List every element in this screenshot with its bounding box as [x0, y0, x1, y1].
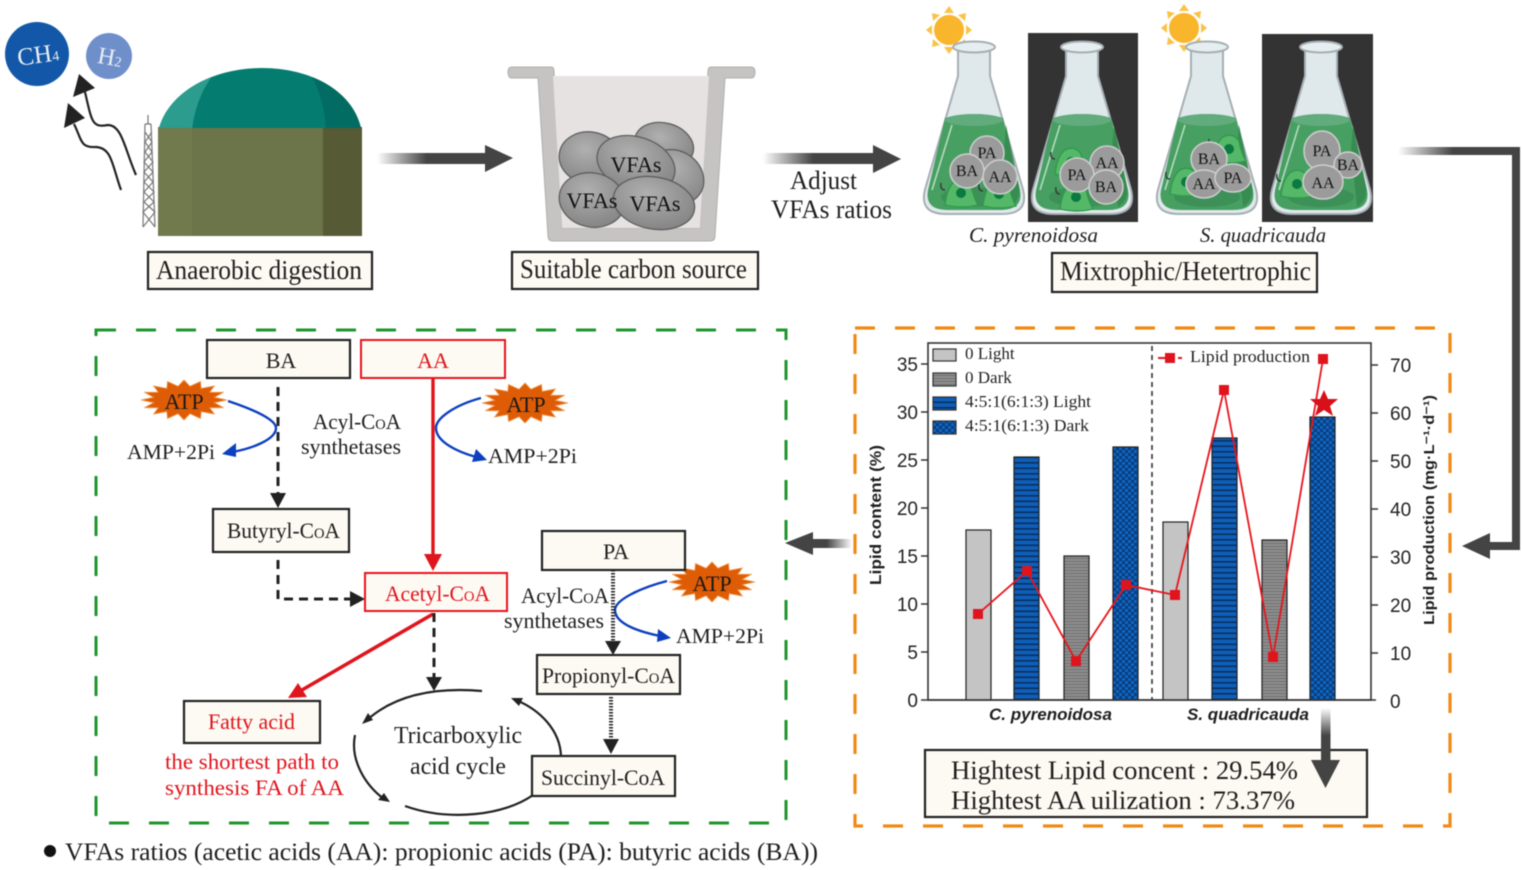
panel: results chart frame — [855, 328, 1450, 826]
stats callout — [925, 750, 1367, 817]
red arrow: AA to Acetyl — [424, 379, 442, 571]
flask: S. quadricauda dark: BA — [1337, 157, 1360, 174]
enzyme label 2 — [504, 583, 609, 633]
flask: C. pyrenoidosa dark: BA — [1095, 179, 1118, 196]
species axis labels: C. pyrenoidosa — [989, 706, 1112, 724]
ATP burst 2: ATP — [506, 392, 546, 417]
left axis labels: 25 — [897, 451, 918, 472]
left axis labels: 35 — [897, 355, 918, 376]
enzyme label 2: Acyl-COA — [521, 583, 609, 608]
box: PA — [542, 531, 685, 570]
ATP burst 3 — [669, 562, 755, 602]
box: BA: BA — [266, 348, 296, 373]
blue curve 2 — [436, 398, 487, 462]
gas bubble: CH4 — [5, 22, 69, 86]
flask: S. quadricauda dark: AA — [1311, 175, 1335, 192]
box: Fatty acid — [184, 701, 320, 743]
arrow: elbow from flasks to chart — [1398, 147, 1520, 559]
flask: C. pyrenoidosa light: BA — [956, 163, 979, 180]
flask: S. quadricauda dark — [1271, 42, 1371, 214]
enzyme label 2: synthetases — [504, 608, 604, 633]
left axis labels — [897, 355, 918, 712]
flask: S. quadricauda light: BA — [1198, 151, 1221, 168]
species axis labels: S. quadricauda — [1187, 706, 1309, 724]
right axis labels: 0 — [1390, 692, 1401, 713]
box: BA — [207, 340, 350, 378]
species labels — [969, 223, 1326, 247]
box: Propionyl-CoA: Propionyl-COA — [542, 663, 675, 688]
arrows: gas release — [64, 74, 136, 190]
right axis labels: 20 — [1390, 596, 1411, 617]
box: Butyryl-CoA — [213, 509, 349, 552]
gas bubble: H2 — [86, 33, 132, 79]
blue curve 3 — [615, 581, 671, 642]
arrow: chart to pathway — [785, 532, 852, 555]
icon: anaerobic digester — [150, 60, 370, 236]
legend: 0 Dark — [965, 368, 1012, 387]
legend: Lipid production — [1190, 347, 1311, 366]
legend: 4:5:1(6:1:3) Dark — [965, 416, 1090, 435]
AMP labels: AMP+2Pi — [676, 624, 764, 648]
red note: shortest path: synthesis FA of AA — [165, 775, 344, 800]
tricarboxylic acid cycle — [354, 690, 561, 815]
AMP labels: AMP+2Pi — [127, 440, 215, 464]
box: PA: PA — [603, 539, 629, 564]
text: adjust VFAs ratios: VFAs ratios — [771, 195, 892, 224]
flask: C. pyrenoidosa light — [924, 42, 1024, 214]
box: Propionyl-CoA — [537, 655, 680, 694]
dotted arrow: Propionyl to Succinyl — [603, 697, 619, 754]
text: adjust VFAs ratios — [771, 166, 892, 224]
flask: S. quadricauda light: PA — [1224, 170, 1243, 187]
flask: C. pyrenoidosa dark — [1032, 42, 1132, 214]
stats callout: Hightest AA uilization : 73.37% — [951, 786, 1295, 815]
gas bubble: H2: H2 — [96, 43, 124, 73]
icon: red star — [1310, 390, 1338, 416]
arrow: chart to callout — [1311, 708, 1340, 788]
right axis labels — [1390, 356, 1411, 713]
stats callout: Hightest Lipid concent : 29.54% — [951, 756, 1298, 785]
blue curve 1 — [222, 401, 276, 457]
panel: metabolic pathway frame — [96, 330, 786, 823]
footnote: VFAs ratios: VFAs ratios (acetic acids (AA): propionic acids (PA): butyric acids (BA)) — [65, 839, 818, 866]
red note: shortest path: the shortest path to — [165, 749, 339, 774]
dashed arrow: Acetyl to cycle — [426, 613, 442, 691]
flask: S. quadricauda light — [1157, 42, 1257, 214]
panel: dark background, S. quadricauda — [1262, 34, 1373, 222]
right axis labels: 10 — [1390, 644, 1411, 665]
right axis labels: 40 — [1390, 500, 1411, 521]
left axis labels: 0 — [907, 691, 918, 712]
flask: C. pyrenoidosa light: PA — [978, 145, 997, 162]
ATP burst 1 — [141, 380, 227, 420]
left axis labels: 30 — [897, 403, 918, 424]
flask: S. quadricauda light: AA — [1192, 176, 1216, 193]
label: suitable carbon source: Suitable carbon source — [520, 254, 747, 284]
tricarboxylic acid cycle: acid cycle — [410, 754, 506, 780]
text: adjust VFAs ratios: Adjust — [790, 166, 858, 195]
icon: sun 1 — [926, 6, 972, 54]
box: Succinyl-CoA: Succinyl-CoA — [541, 765, 665, 790]
box: Acetyl-CoA: Acetyl-COA — [385, 581, 490, 606]
AMP labels: AMP+2Pi — [488, 444, 577, 468]
icon: beaker with VFAs: VFAs — [630, 191, 680, 216]
left axis labels: 15 — [897, 547, 918, 568]
ATP burst 3: ATP — [692, 571, 732, 596]
species labels: S. quadricauda — [1200, 223, 1326, 247]
box: Acetyl-CoA — [365, 573, 507, 611]
tricarboxylic acid cycle: Tricarboxylic — [394, 723, 522, 749]
right axis labels: 60 — [1390, 404, 1411, 425]
box: AA — [361, 340, 505, 378]
left axis labels: 20 — [897, 499, 918, 520]
red arrow: Acetyl to Fatty acid — [288, 614, 433, 698]
icon: beaker with VFAs — [508, 67, 755, 241]
lipid production line — [973, 354, 1328, 666]
dotted arrow: PA to Propionyl — [605, 570, 621, 655]
left axis labels: 5 — [907, 643, 918, 664]
dashed arrow: Butyryl to Acetyl — [278, 560, 365, 607]
dashed arrow: BA to Butyryl — [270, 387, 286, 508]
AMP labels — [127, 440, 764, 648]
right axis labels: 50 — [1390, 452, 1411, 473]
icon: sun 2 — [1161, 4, 1207, 52]
axes ticks — [921, 364, 1378, 700]
flask: C. pyrenoidosa dark: AA — [1095, 155, 1119, 172]
bars — [966, 417, 1335, 700]
ATP burst 1: ATP — [164, 389, 204, 414]
icon: beaker with VFAs: VFAs — [611, 152, 661, 177]
enzyme label 1 — [301, 409, 401, 459]
panel: dark background, C. pyrenoidosa — [1028, 33, 1138, 222]
axis title right: Lipid production (mg·L⁻¹·d⁻¹) — [1421, 395, 1438, 625]
box: Butyryl-CoA: Butyryl-COA — [227, 518, 340, 543]
legend — [933, 344, 1311, 435]
right axis labels: 30 — [1390, 548, 1411, 569]
box: Succinyl-CoA — [532, 756, 675, 796]
box: Fatty acid: Fatty acid — [208, 709, 295, 734]
species labels: C. pyrenoidosa — [969, 223, 1098, 247]
arrow: digestion to carbon source — [377, 145, 513, 172]
icon: gas tower — [143, 115, 155, 227]
label: mixtrophic/hetertrophic: Mixtrophic/Hetertrophic — [1060, 256, 1311, 286]
enzyme label 1: Acyl-COA — [313, 409, 401, 434]
flask: C. pyrenoidosa dark: PA — [1068, 167, 1087, 184]
species axis labels — [989, 706, 1309, 724]
gas bubble: CH4: CH4 — [16, 39, 61, 72]
enzyme label 1: synthetases — [301, 434, 401, 459]
left axis labels: 10 — [897, 595, 918, 616]
chart: lipid content and production — [868, 343, 1438, 724]
legend: 0 Light — [965, 344, 1015, 363]
red note: shortest path — [165, 749, 344, 800]
arrow: adjust ratios — [763, 145, 901, 173]
box: AA: AA — [417, 348, 449, 373]
ATP burst 2 — [482, 383, 568, 423]
label: anaerobic digestion: Anaerobic digestion — [156, 255, 362, 285]
icon: beaker with VFAs: VFAs — [567, 188, 617, 213]
right axis labels: 70 — [1390, 356, 1411, 377]
flask: S. quadricauda dark: PA — [1313, 143, 1332, 160]
legend: 4:5:1(6:1:3) Light — [965, 392, 1091, 411]
axis title left: Lipid content (%) — [868, 445, 885, 585]
flask: C. pyrenoidosa light: AA — [988, 169, 1012, 186]
